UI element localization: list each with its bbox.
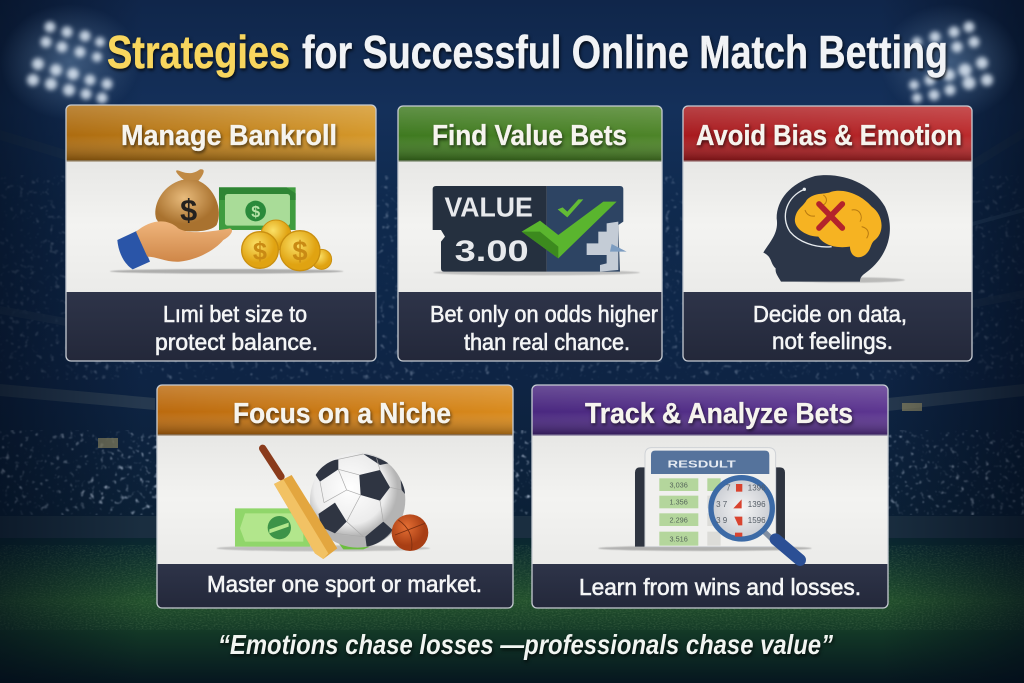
icon: results sheet with magnifier: 3.516 <box>669 535 688 544</box>
icon: results sheet with magnifier: 1.356 <box>669 498 688 507</box>
icon: money bag, hand, banknote and coins <box>110 169 343 274</box>
caption: Avoid Bias & Emotion: not feelings. <box>772 328 893 354</box>
icon: results sheet with magnifier: RESDULT <box>667 459 736 470</box>
caption: Find Value Bets: than real chance. <box>464 329 630 355</box>
heading: Find Value Bets: Find Value Bets <box>432 120 627 152</box>
icon: results sheet with magnifier: 3,036 <box>669 480 688 489</box>
caption: Find Value Bets: Bet only on odds higher <box>430 301 658 327</box>
heading: Avoid Bias & Emotion: Avoid Bias & Emotion <box>696 120 962 152</box>
icon: money bag, hand, banknote and coins: $ <box>180 194 197 228</box>
title: Strategies <box>107 26 290 78</box>
icon: money bag, hand, banknote and coins: $ <box>292 236 308 267</box>
caption: Avoid Bias & Emotion <box>753 301 907 354</box>
icon: results sheet with magnifier: 1396 <box>748 500 766 509</box>
panel: Find Value Bets <box>398 106 662 361</box>
icon: money bag, hand, banknote and coins: $ <box>253 237 267 265</box>
icon: results sheet with magnifier: 3 9 <box>716 516 728 525</box>
caption: Avoid Bias & Emotion: Decide on data, <box>753 301 907 327</box>
icon: value ticket with check <box>433 186 640 275</box>
icon: banknote, cricket bat, football and ball <box>217 448 430 559</box>
stadium floodlights left <box>0 4 140 120</box>
caption: Focus on a Niche: Master one sport or market. <box>207 571 482 597</box>
panel: Track & Analyze Bets <box>532 385 888 608</box>
icon: head with brain and red cross <box>763 175 905 283</box>
stadium floodlights right <box>880 4 1020 120</box>
icon: results sheet with magnifier: 2.296 <box>669 515 688 524</box>
icon: results sheet with magnifier: 1596 <box>748 516 766 525</box>
caption: Track & Analyze Bets: Learn from wins and losses. <box>579 574 861 600</box>
icon: results sheet with magnifier <box>598 448 812 560</box>
caption: Find Value Bets <box>430 301 658 355</box>
icon: money bag, hand, banknote and coins: $ <box>251 204 260 221</box>
icon: value ticket with check: 3.00 <box>455 235 529 268</box>
panel: Manage Bankroll <box>66 105 376 361</box>
icon: results sheet with magnifier: 7 <box>726 483 731 492</box>
heading: Manage Bankroll: Manage Bankroll <box>121 120 337 152</box>
caption: Manage Bankroll: Lımi bet size to <box>163 301 307 327</box>
caption: Manage Bankroll: protect balance. <box>155 329 318 355</box>
panel: Focus on a Niche <box>157 385 513 608</box>
icon: results sheet with magnifier: 1396 <box>748 483 766 492</box>
closing quote: “Emotions chase losses —professionals chase value” <box>218 629 833 660</box>
heading: Focus on a Niche: Focus on a Niche <box>233 398 451 430</box>
heading: Track & Analyze Bets: Track & Analyze Bets <box>585 398 853 430</box>
icon: value ticket with check: VALUE <box>444 192 533 223</box>
panel: Avoid Bias & Emotion <box>683 106 972 361</box>
caption: Manage Bankroll <box>155 301 318 355</box>
icon: results sheet with magnifier: 3 7 <box>716 500 728 509</box>
